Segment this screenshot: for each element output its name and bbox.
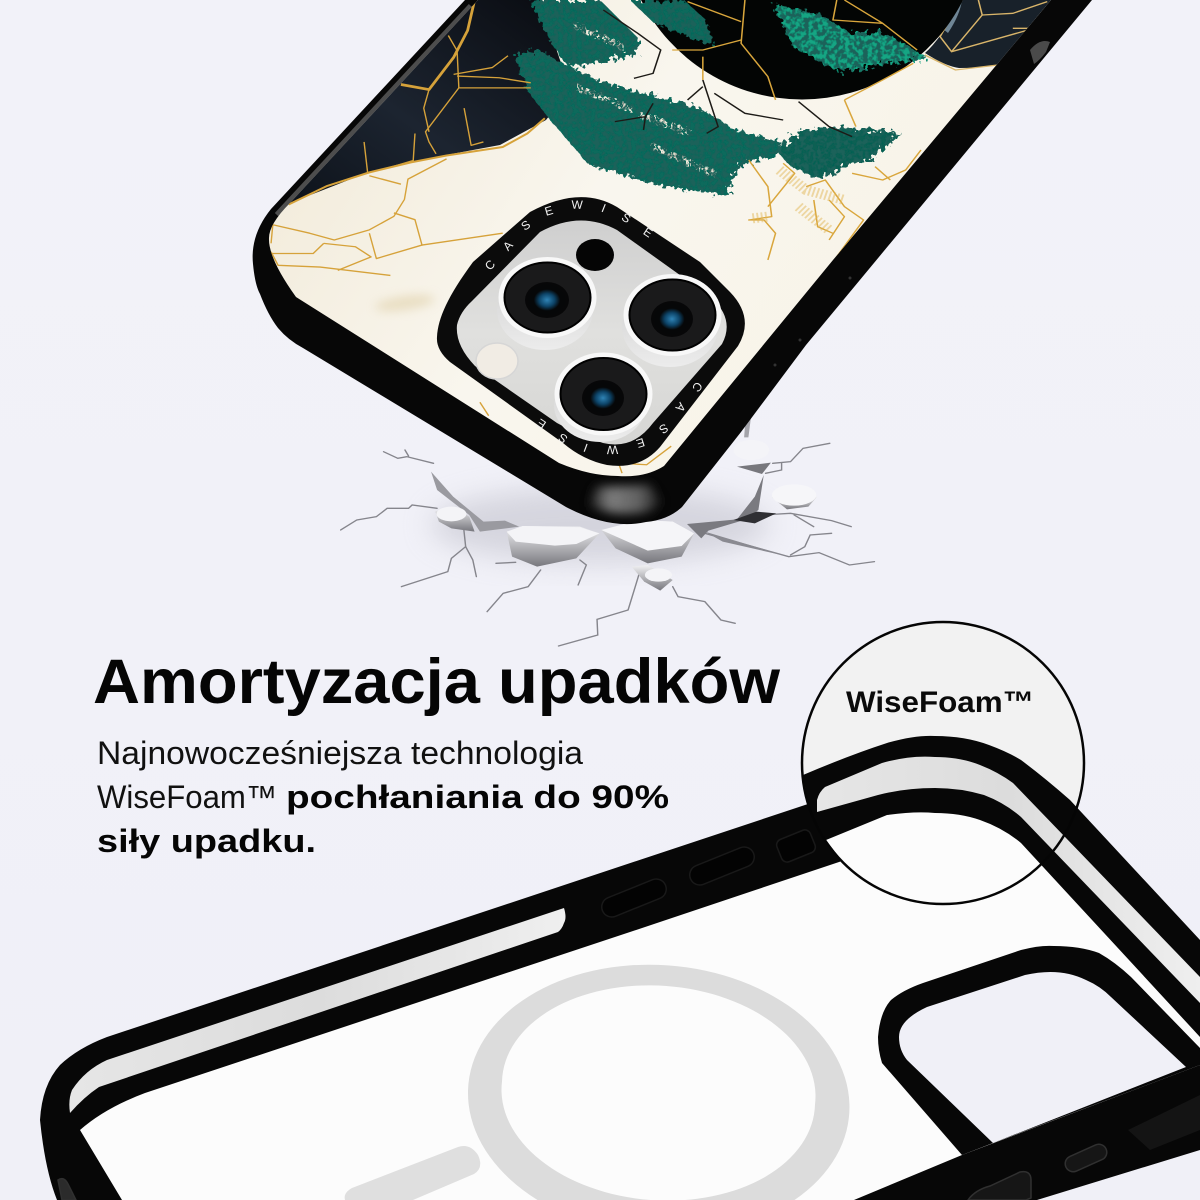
flash <box>476 343 518 379</box>
ring text top: CASEWISE <box>486 200 653 270</box>
bumper texture patch <box>1128 1095 1200 1150</box>
magnifier label: WiseFoam™ <box>846 686 1034 719</box>
bumper highlight <box>588 485 662 514</box>
left side strip <box>69 908 565 1113</box>
description text <box>97 735 669 859</box>
chunk left <box>507 526 600 567</box>
branches <box>603 10 852 137</box>
sensor <box>576 239 614 271</box>
right side strip <box>817 757 1200 1003</box>
MagSafe ring <box>468 965 849 1200</box>
foliage gaps <box>575 25 714 173</box>
ring text bottom: CASEWISE <box>537 383 702 454</box>
cracked ground illustration <box>341 413 874 646</box>
bottom ports <box>58 1142 1109 1200</box>
black sun <box>641 0 963 100</box>
outer bumper <box>40 736 1200 1200</box>
lens: right <box>622 274 722 367</box>
clear back panel <box>80 812 1200 1200</box>
marble back <box>265 0 1055 480</box>
bonsai foliage <box>514 0 928 196</box>
lens: top left <box>497 257 596 350</box>
description text: siły upadku. <box>97 823 316 859</box>
camera plate <box>457 220 727 444</box>
title: Amortyzacja upadków <box>93 647 781 717</box>
description text: WiseFoam™ <box>97 779 277 815</box>
small chunk pieces <box>435 507 475 532</box>
camera cutout hole <box>899 972 1186 1143</box>
MagSafe alignment pill <box>345 1146 480 1200</box>
gold veins <box>271 0 671 473</box>
side buttons <box>774 41 1050 366</box>
volume and action buttons <box>599 828 817 920</box>
crack rim left <box>431 472 519 532</box>
dark marble right <box>925 0 1051 68</box>
WiseFoam magnifier outline <box>802 622 1084 904</box>
lens: bottom <box>554 352 652 442</box>
dark marble left <box>290 0 560 204</box>
description text: pochłaniania do 90% <box>286 779 669 815</box>
upper phone with marble case <box>252 0 1092 524</box>
lower transparent case <box>40 736 1200 1200</box>
WiseFoam magnifier fill <box>802 622 1084 904</box>
bumper <box>253 0 1092 524</box>
crack rim right plate <box>687 475 764 538</box>
description text: Najnowocześniejsza technologia <box>97 735 583 771</box>
camera island ring <box>437 197 745 466</box>
chunk right <box>601 520 694 563</box>
camera cutout frame <box>878 946 1200 1155</box>
